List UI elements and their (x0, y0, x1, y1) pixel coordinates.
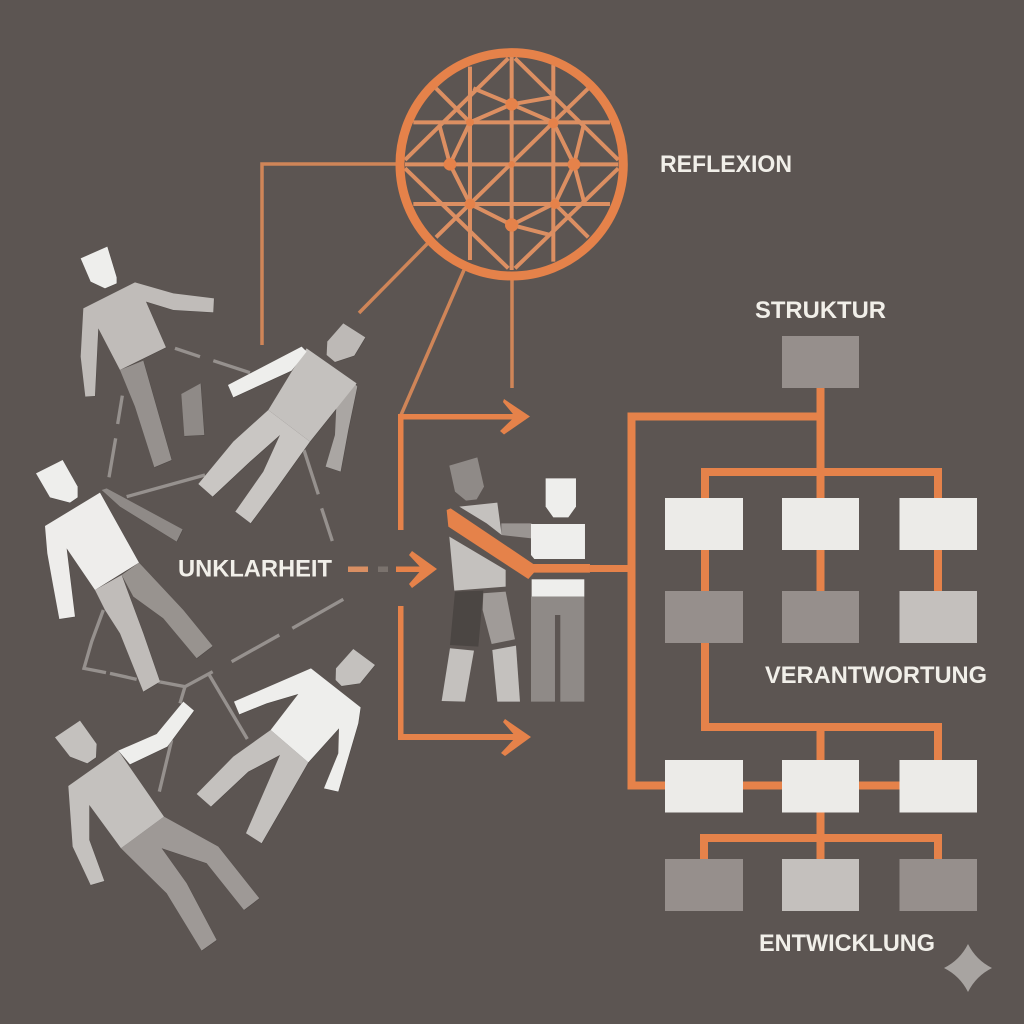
connector: globe diagonal to figure (359, 243, 428, 313)
leg (120, 361, 172, 467)
first tier bar (705, 472, 938, 498)
org chart boxes (665, 336, 977, 911)
boxes: row five (665, 859, 977, 911)
raised arm (228, 347, 307, 397)
torso and arm (68, 751, 164, 885)
connector: globe to upper arrow stem (401, 270, 464, 415)
icon: reflexion globe network (400, 53, 623, 276)
front leg (95, 575, 160, 692)
right person torso (531, 524, 585, 559)
label: reflexion: REFLEXION (660, 151, 792, 178)
arrow shaft (396, 566, 426, 572)
left person dark thigh (450, 591, 483, 647)
left person arm (501, 523, 532, 538)
tier two drops (705, 550, 938, 591)
dashed grey links between figures (84, 348, 343, 792)
head (336, 649, 375, 686)
left person thigh (483, 592, 515, 644)
label: entwicklung: ENTWICKLUNG (759, 930, 935, 957)
figure 4: lower right person (197, 649, 375, 843)
faint dash (378, 566, 388, 572)
label: verantwortung: VERANTWORTUNG (765, 662, 987, 689)
thin connectors from globe (262, 164, 512, 415)
legs (198, 410, 310, 523)
rear leg (122, 563, 213, 658)
org chart connectors (590, 387, 938, 859)
figure 5: bottom left person (55, 702, 259, 951)
globe nodes (444, 98, 580, 232)
globe outer ring (400, 53, 623, 276)
right person belt (532, 579, 584, 597)
arrow head (500, 399, 530, 434)
third tier (704, 812, 938, 859)
label: unklarheit: UNKLARHEIT (178, 556, 332, 582)
stem (398, 606, 526, 740)
torso (268, 348, 357, 442)
torso and arms (234, 668, 361, 792)
legs (121, 817, 259, 951)
raised arm (118, 702, 194, 764)
head (55, 721, 97, 763)
figure 3: middle left person (36, 460, 213, 692)
connector: globe vertical (510, 279, 514, 388)
head (81, 247, 117, 288)
right person head (546, 478, 576, 517)
rear arm (102, 488, 183, 542)
right person legs (531, 597, 584, 702)
box: top (782, 336, 859, 388)
arrow: upper bracket arrow (398, 399, 530, 530)
link from central figures (590, 565, 632, 572)
centre drop (816, 727, 824, 760)
top trunk (816, 387, 824, 498)
left person torso (449, 537, 506, 591)
loose block (181, 383, 204, 436)
left person shin two (492, 646, 520, 702)
head (327, 323, 365, 362)
dashes lower (84, 599, 343, 792)
second tier bracket (705, 642, 938, 760)
boxes: row three (665, 591, 977, 643)
figure 1: top left person (81, 247, 214, 467)
stem (398, 414, 526, 530)
torso and arm (45, 493, 139, 619)
orange sash (447, 508, 590, 579)
left person shin (442, 648, 474, 702)
head (36, 460, 78, 503)
figure 2: top right falling person (198, 323, 365, 523)
legs (197, 730, 308, 843)
row links (743, 782, 900, 790)
arrow: lower bracket arrow (398, 606, 531, 756)
rear arm (326, 382, 357, 472)
boxes: row two (665, 498, 977, 550)
arrow head (409, 551, 437, 588)
torso and arms (81, 282, 214, 397)
globe inner lattice (405, 57, 618, 270)
dashes upper (109, 348, 332, 541)
long left bracket (632, 416, 820, 786)
left person head (449, 457, 484, 501)
label: struktur: STRUKTUR (755, 297, 886, 324)
connector: globe to figures, elbow (262, 164, 397, 345)
central figures: cooperating people (442, 457, 590, 702)
icon: four point star (944, 944, 992, 992)
boxes: row four (665, 760, 977, 812)
arrow: unklarheit dashed arrow (348, 551, 437, 588)
left person shoulder (459, 503, 502, 535)
dash (348, 566, 368, 572)
arrow head (501, 719, 531, 756)
